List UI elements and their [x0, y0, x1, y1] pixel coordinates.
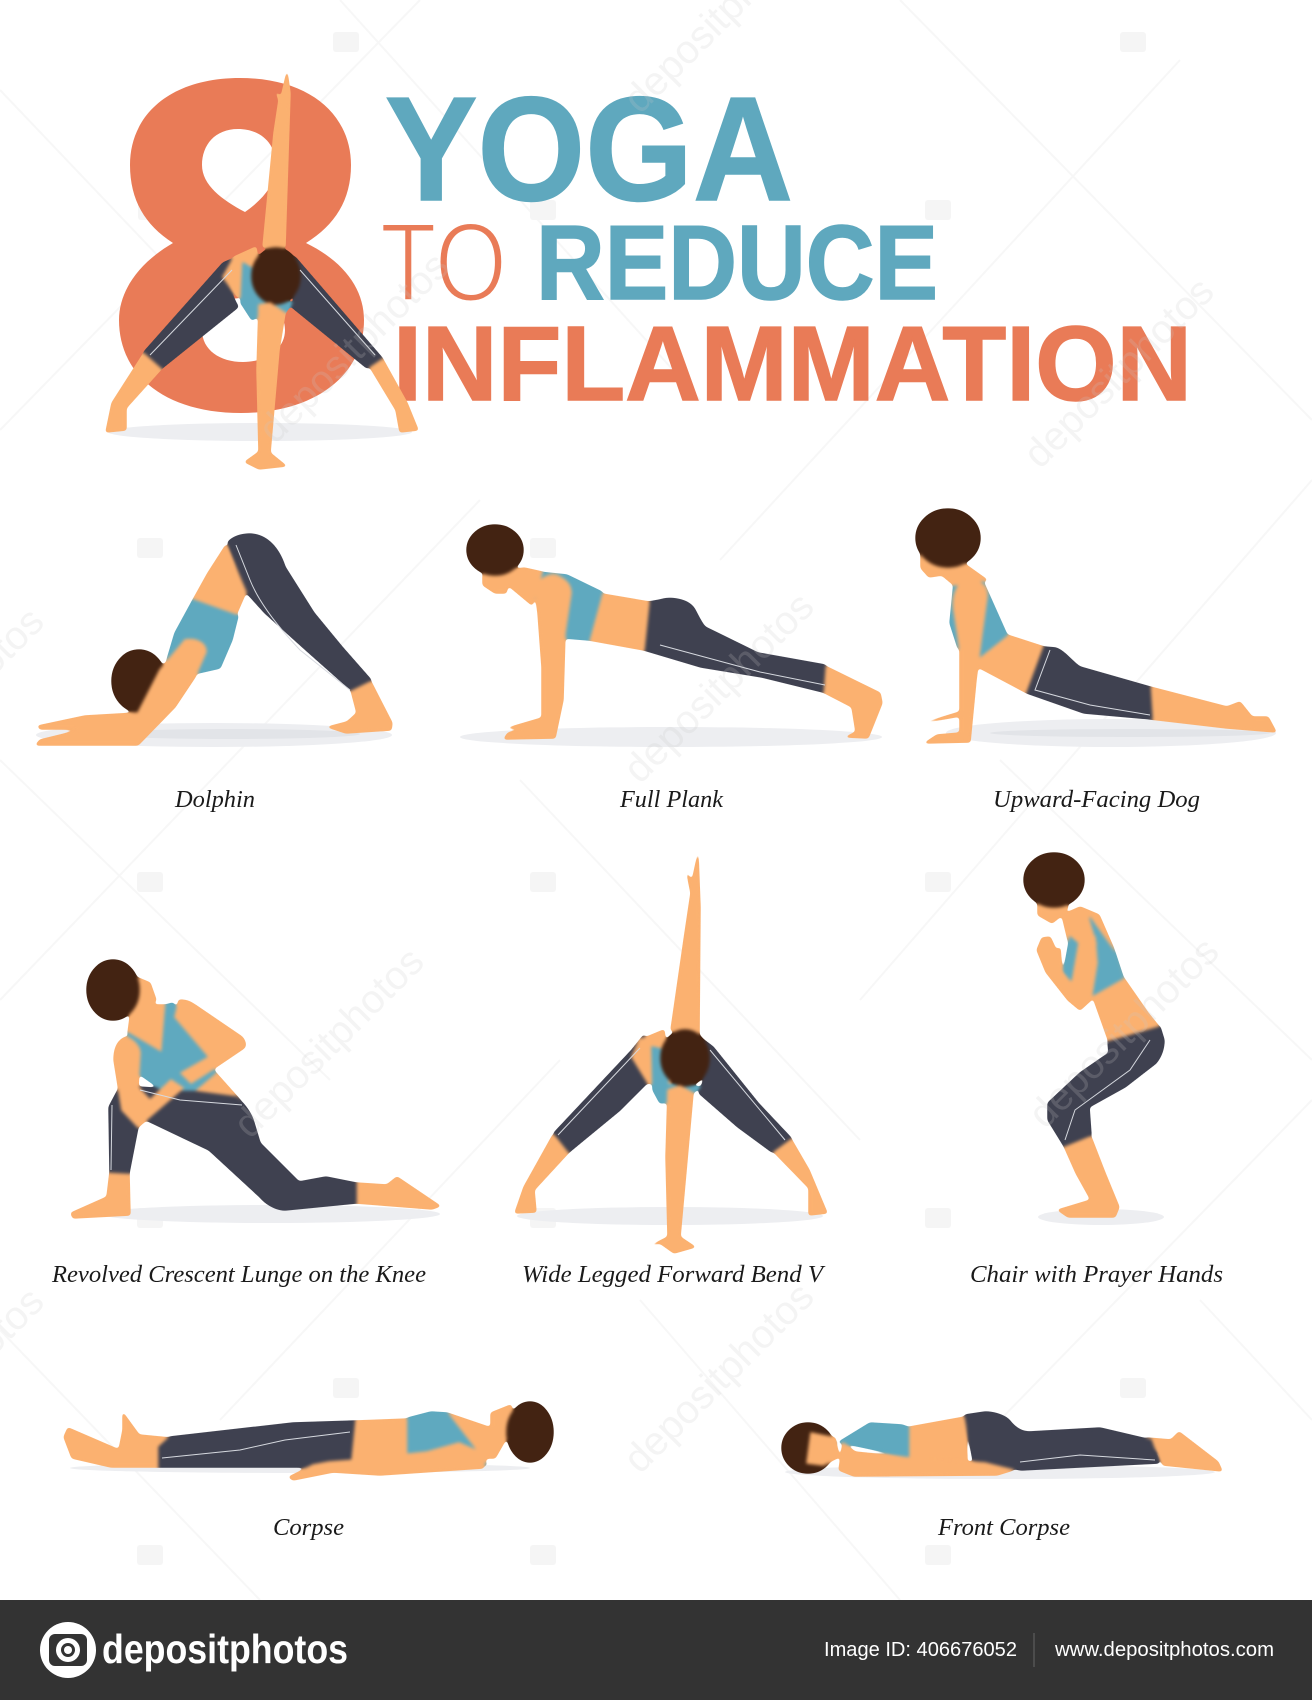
- label: Dolphin: [174, 787, 255, 813]
- pose: Upward-Facing Dog: [916, 509, 1276, 813]
- pose: Front Corpse: [782, 1412, 1222, 1541]
- icon: camera logo: [40, 1622, 96, 1678]
- footer bar: [0, 1600, 1312, 1700]
- image id: Image ID: 406676052: [824, 1639, 1017, 1661]
- title: [119, 67, 1192, 423]
- text: depositphotos: [615, 584, 822, 791]
- text: depositphotos: [1015, 269, 1222, 476]
- website url: www.depositphotos.com: [1054, 1639, 1274, 1661]
- text: depositphotos: [225, 939, 432, 1146]
- pose: Dolphin: [36, 534, 392, 813]
- text: depositphotos: [1020, 929, 1227, 1136]
- figure: title wide-legged pose: [106, 72, 418, 469]
- label: Front Corpse: [937, 1515, 1070, 1541]
- heading: INFLAMMATION: INFLAMMATION: [393, 305, 1192, 423]
- big numeral 8: [119, 78, 364, 413]
- pose: Wide Legged Forward Bend V: [515, 854, 827, 1288]
- label: Revolved Crescent Lunge on the Knee: [51, 1262, 426, 1288]
- heading: TO: TO: [380, 200, 507, 325]
- label: Chair with Prayer Hands: [970, 1262, 1223, 1288]
- pose: Full Plank: [460, 525, 882, 813]
- heading: REDUCE: REDUCE: [536, 204, 938, 322]
- pose: Revolved Crescent Lunge on the Knee: [51, 960, 440, 1288]
- heading: YOGA: YOGA: [385, 67, 793, 232]
- pose: Chair with Prayer Hands: [970, 853, 1223, 1288]
- footer logo text: depositphotos: [102, 1626, 348, 1672]
- label: Corpse: [273, 1515, 344, 1541]
- label: Wide Legged Forward Bend V: [522, 1262, 825, 1288]
- pose: Corpse: [64, 1402, 553, 1541]
- text: depositphotos: [615, 1274, 822, 1481]
- label: Upward-Facing Dog: [993, 787, 1200, 813]
- label: Full Plank: [619, 787, 723, 813]
- text: depositphotos: [250, 244, 457, 451]
